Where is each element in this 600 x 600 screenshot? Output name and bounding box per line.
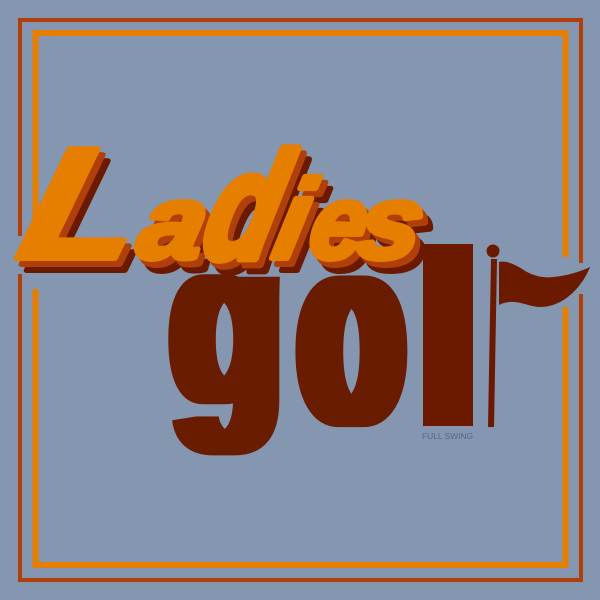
shadow layer dark: e	[312, 175, 388, 292]
shadow layer dark	[16, 128, 443, 304]
shadow layer dark: L	[16, 128, 175, 304]
shadow layer mid	[11, 122, 438, 298]
letter g: g	[172, 187, 281, 455]
shadow layer mid: L	[11, 122, 170, 298]
shadow layer dark: a	[139, 176, 229, 292]
top layer orange: a	[129, 164, 219, 280]
shadow layer dark: d	[200, 135, 315, 303]
top layer orange: s	[350, 165, 433, 281]
top layer orange: i	[265, 156, 325, 282]
caption: FULL SWING	[422, 432, 473, 441]
shadow layer mid: s	[355, 171, 438, 287]
shadow layer mid: a	[134, 170, 224, 286]
shadow layer mid: i	[270, 162, 330, 288]
letter l	[423, 244, 473, 426]
word: Ladies (3 layers)	[6, 116, 443, 304]
shadow layer mid: d	[195, 129, 310, 297]
shadow layer dark: s	[360, 177, 443, 293]
word: gol	[172, 177, 473, 483]
top layer orange	[6, 116, 433, 292]
icon: golf flag	[486, 244, 590, 427]
top layer orange: e	[302, 163, 378, 280]
top layer orange: L	[6, 116, 165, 292]
shadow layer dark: i	[275, 168, 335, 294]
letter o: o	[301, 177, 402, 483]
top layer orange: d	[190, 123, 305, 291]
inner frame	[36, 33, 566, 565]
shadow layer mid: e	[307, 169, 383, 286]
